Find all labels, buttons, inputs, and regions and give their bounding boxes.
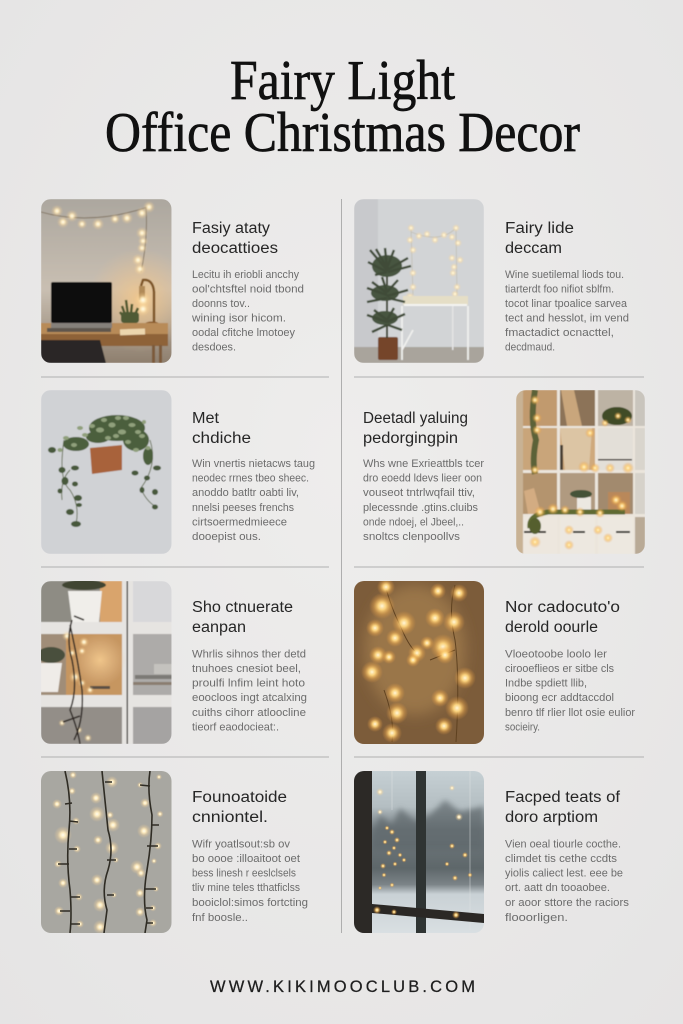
body text: wining isor hicom. [191, 312, 286, 324]
body text: cirooeflieos er sitbe cls [505, 663, 615, 675]
body text [192, 458, 315, 543]
heading [192, 410, 251, 447]
heading: doro arptiom [505, 809, 598, 826]
panel: warm bokeh lights [354, 578, 635, 744]
panel: side table lights [354, 199, 629, 363]
footer website: WWW.KIKIMOOCLUB.COM [210, 978, 475, 996]
body text: Vloeotoobe loolo ler [505, 648, 607, 660]
body text: decdmaud. [505, 342, 555, 354]
title [105, 50, 580, 164]
panel: vertical light strands [41, 771, 308, 934]
body text: tect and hesslot, im vend [505, 312, 629, 324]
body text: dooepist ous. [192, 531, 261, 543]
body text: Whrlis sihnos ther detd [192, 648, 306, 660]
body text [505, 648, 635, 734]
photo: white shelves with dark wire lights [37, 580, 172, 744]
heading: derold oourle [505, 619, 598, 636]
body text: desdoes. [192, 342, 236, 354]
heading [363, 410, 468, 447]
heading [505, 220, 574, 257]
heading: Founoatoide [192, 789, 287, 806]
heading: Fairy lide [505, 220, 574, 237]
photo: hanging ivy in terracotta planter [41, 390, 172, 554]
body text: dro eoedd ldevs lieer oon [363, 472, 482, 484]
photo: snowy window with fairy lights [354, 771, 484, 933]
body text: tiarterdt foo nifiot sblfm. [505, 284, 614, 296]
photo: glowing amber fairy lights on brown wall [354, 578, 484, 744]
body text: yiolis caliect lest. eee be [505, 868, 623, 880]
heading: deccam [505, 240, 562, 257]
body text: Indbe spdiett llib, [505, 678, 587, 690]
body text [505, 269, 629, 354]
body text: oodal cfitche lmotoey [192, 327, 296, 339]
heading: Deetadl yaluing [363, 410, 468, 427]
body text: vouseot tntrlwqfail ttiv, [363, 487, 475, 499]
body text: booiclol:simos fortcting [192, 897, 308, 909]
body text: tocot linar tpoalice sarvea [505, 298, 627, 310]
body text: eoocloos ingt atcalxing [192, 692, 307, 704]
photo: laptop desk with fairy lights and lamp [41, 199, 172, 363]
panel: shelf string lights [37, 580, 307, 744]
body text: socieiry. [505, 722, 540, 734]
body text: bioong ecr addtaccdol [505, 692, 614, 704]
body text: bess linesh r eeslclsels [192, 868, 297, 880]
body text: or aoor sttore the raciors [505, 897, 630, 909]
heading: Facped teats of [505, 789, 621, 806]
body text: Win vnertis nietacws taug [192, 458, 315, 470]
body text [192, 838, 308, 924]
photo: cube shelving with lights and garland [516, 390, 645, 554]
panel: shelf garland [363, 390, 645, 554]
body text: doonns tov.. [192, 298, 250, 310]
body text [505, 838, 630, 924]
body text: nnelsi peeses frenchs [192, 502, 295, 514]
panel: wall planter [41, 390, 315, 554]
body text: bo oooe :illoaitoot oet [192, 853, 300, 865]
body text: proulfi lnfim leint hoto [192, 678, 305, 690]
body text: tliv mine teles tthatficlss [192, 882, 301, 894]
body text: Whs wne Exrieattbls tcer [363, 458, 484, 470]
heading [192, 789, 287, 826]
body text: neodec rrnes tbeo sheec. [192, 472, 309, 484]
heading [192, 220, 278, 257]
body text: flooorligen. [505, 912, 568, 924]
heading: Sho ctnuerate [192, 599, 293, 616]
body text: Vien oeal tiourle cocthe. [505, 838, 621, 850]
heading: deocattioes [192, 240, 278, 257]
heading: chdiche [192, 430, 251, 447]
heading: Nor cadocuto'o [505, 599, 620, 616]
body text: benro tlf rlier llot osie eulior [505, 707, 635, 719]
heading [192, 599, 293, 636]
heading [505, 599, 620, 636]
body text: ort. aatt dn tooaobee. [505, 882, 610, 894]
photo: white table, potted palm and light frame [354, 199, 484, 363]
heading [505, 789, 621, 826]
body text: tieorf eaodocieat:. [192, 722, 279, 734]
body text: ool'chtsftel noid tbond [192, 284, 304, 296]
photo: three hanging strands on grey wall [41, 771, 172, 934]
body text: cuiths cihorr atloocline [192, 707, 306, 719]
body text: onde ndoej, el Jbeel,.. [363, 516, 464, 528]
body text: Lecitu ih eriobli ancchy [192, 269, 300, 281]
body text: climdet tis cethe ccdts [505, 853, 618, 865]
body text: plecessnde .gtins.cluibs [363, 502, 479, 514]
body text: Wine suetilemal liods tou. [505, 269, 624, 281]
panel: desk garland [41, 199, 304, 363]
panel: winter window [354, 771, 630, 933]
body text: tnuhoes cnesiot beel, [192, 663, 301, 675]
title: Office Christmas Decor [105, 102, 580, 164]
body text: cirtsoermedmieece [192, 516, 287, 528]
body text: anoddo batltr oabti liv, [192, 487, 299, 499]
title: Fairy Light [230, 50, 455, 112]
heading: cnniontel. [192, 809, 268, 826]
body text: fmactadict ocnacttel, [505, 327, 614, 339]
body text [363, 458, 484, 543]
heading: Met [192, 410, 220, 427]
heading: eanpan [192, 619, 246, 636]
body text: Wifr yoatlsout:sb ov [192, 838, 291, 850]
body text [191, 269, 304, 354]
heading: Fasiy ataty [192, 220, 270, 237]
body text: fnf boosle.. [192, 912, 248, 924]
body text [192, 648, 307, 734]
body text: snoltcs clenpoollvs [363, 531, 461, 543]
heading: pedorgingpin [363, 430, 458, 447]
